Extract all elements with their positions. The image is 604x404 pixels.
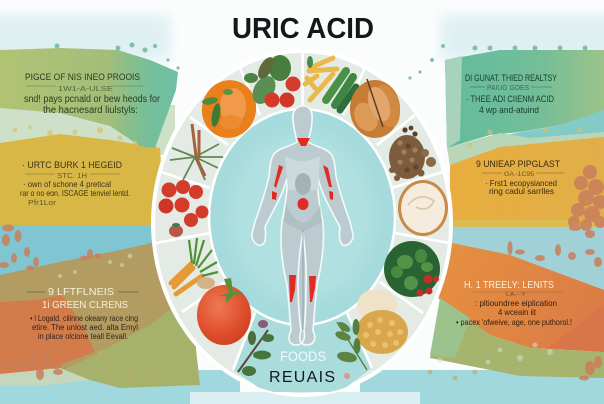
- panel: top right text: DI GUNAT. THIED REALTSY: [465, 73, 557, 83]
- panel: top left text: PIGCE OF NIS INEO PROOIS: [25, 72, 140, 83]
- elbows: [274, 165, 283, 188]
- right stack: [360, 370, 604, 404]
- panel: bottom right text: 4 wceain iit: [498, 307, 537, 317]
- panel: middle right text: ring cadul sarrlles: [489, 186, 554, 196]
- panel: middle right text: 9 UNIEAP PIPGLAST: [476, 159, 560, 170]
- outer ring: [151, 49, 453, 397]
- left upper leaf cluster: [2, 224, 14, 232]
- panel: bottom left text: in place olcione teall Eevall.: [38, 332, 128, 341]
- food: greens and tomatoes: [244, 55, 300, 108]
- left lower leaf cluster: [30, 351, 36, 365]
- bottom teal tile: [233, 313, 372, 392]
- foods caption: FOODS: [280, 349, 326, 364]
- food: yellow beans and cucumbers: [305, 56, 356, 110]
- abdomen: [295, 173, 311, 195]
- reuais caption: REUAIS: [269, 369, 335, 386]
- food: cherry tomatoes: [158, 180, 208, 237]
- circular wheel: [151, 49, 453, 397]
- panel: middle left text: · URTC BURK 1 HEGEID: [22, 160, 122, 170]
- food: leafy greens with berries: [384, 241, 440, 297]
- panel: bottom right text: LA—Y: [506, 292, 526, 298]
- food: bread pastry: [350, 79, 404, 138]
- panel: middle left text: STC. 1H: [57, 173, 87, 180]
- panel: top left text: [24, 72, 161, 116]
- panel: top right text: [465, 73, 557, 116]
- panel: top left text: the hacnesard liulstyls:: [43, 105, 138, 116]
- inner circle: [209, 109, 395, 325]
- panel: top right text: · THEE ADI CIIENM ACID: [466, 94, 554, 104]
- food: chickpeas and hummus: [356, 289, 408, 354]
- right tree: [583, 165, 597, 179]
- panel: bottom left text: etire. The unlost aed. alta Emyl: [32, 323, 138, 332]
- panel: middle left text: · own of schone 4 pretical: [23, 179, 111, 189]
- panel: top right text: 4 wp and-atuind: [479, 105, 539, 116]
- panel: top left text: 1W1-A-ULSE: [58, 86, 113, 93]
- body silhouette: [252, 106, 353, 345]
- right lower: [585, 361, 595, 375]
- red joints: [272, 138, 333, 302]
- panel: bottom right text: [456, 280, 572, 327]
- food: orange squash: [195, 74, 263, 144]
- right upper leaf row: [508, 241, 512, 255]
- food: carrots: [171, 238, 218, 294]
- panel: bottom right text: : pltioundree eiplication: [475, 298, 557, 308]
- food: herb sprig right: [334, 319, 367, 379]
- torso shading: [285, 156, 320, 190]
- neck: [297, 138, 310, 146]
- panel: middle left text: rar o no eon. ISCAGE tenviel lentd.: [20, 188, 130, 198]
- panel: bottom left text: 1i GREEN CLRENS: [42, 300, 128, 311]
- panel: bottom left text: 9 LFTFLNEIS: [48, 287, 114, 298]
- panel: bottom right text: H. 1 TREELY: LENITS: [464, 280, 554, 291]
- pelvis joint: [298, 198, 308, 210]
- left stack: [0, 105, 175, 155]
- food: large tomato: [197, 278, 251, 345]
- food: bowl of cream: [398, 180, 448, 236]
- panel: middle right text: GA -1C95: [504, 171, 534, 178]
- panel: middle right text: · Frst1 ecopysianced: [485, 178, 557, 188]
- panel: bottom left text: [27, 287, 138, 341]
- food: grain stalks: [170, 124, 223, 180]
- food: lentils and seeds: [389, 126, 436, 181]
- pelvis: [284, 205, 322, 232]
- food: herb sprig left: [238, 320, 274, 376]
- panel: middle left text: [20, 160, 130, 207]
- panel: middle right text: [476, 159, 564, 196]
- panel: top left text: snd! pays pcnald or bew heods for: [24, 94, 161, 105]
- panel: bottom left text: • l Logald. cilinne okeany race cing: [30, 314, 138, 323]
- human body figure: [252, 106, 353, 345]
- panel: bottom right text: • pacex 'ofweive, age, one puthorol.!: [456, 317, 572, 327]
- wrists: [272, 191, 277, 200]
- panel: top right text: PAIUG GOES: [487, 85, 529, 92]
- title: URIC ACID: [232, 13, 374, 45]
- food icons: [158, 55, 448, 379]
- spokes: [155, 50, 449, 370]
- knees: [289, 275, 296, 302]
- panel: middle left text: Pfr1Lor: [28, 200, 57, 207]
